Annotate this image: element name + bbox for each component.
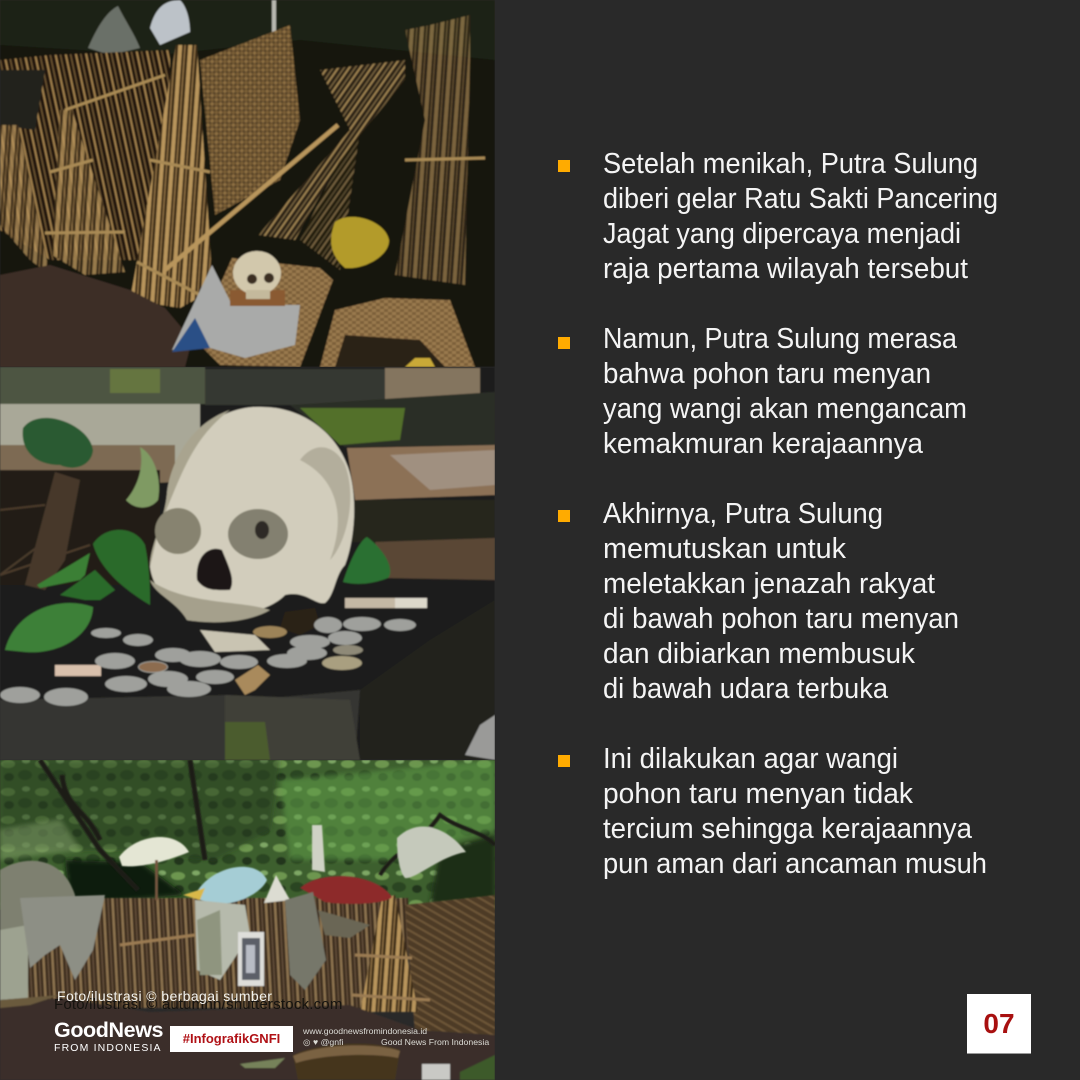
photo credit text: Foto/ilustrasi © berbagai sumber xyxy=(57,988,272,1004)
bullet 3 text: di bawah pohon taru menyan xyxy=(603,603,959,635)
bullet 1 text: Setelah menikah, Putra Sulung xyxy=(603,148,978,180)
bullet 4 text: pun aman dari ancaman musuh xyxy=(603,848,987,880)
bullet 1 text: diberi gelar Ratu Sakti Pancering xyxy=(603,183,998,215)
bullet 1 text: Jagat yang dipercaya menjadi xyxy=(603,218,961,250)
photo 3: Trunyan cemetery with umbrellas, cloth and bamboo fence xyxy=(0,760,495,1080)
bullet 2 text xyxy=(558,323,967,460)
logo: GoodNews from Indonesia xyxy=(54,1018,163,1054)
page number box: 07 xyxy=(983,1008,1015,1039)
photo credit text: Foto/ilustrasi © autumnn/shutterstock.com xyxy=(54,996,343,1013)
bullet 1 text xyxy=(558,148,998,285)
logo: GoodNews from Indonesia: GoodNews xyxy=(54,1018,163,1042)
bullet 2 text: yang wangi akan mengancam xyxy=(603,393,967,425)
bullet list xyxy=(558,148,998,880)
photo 1: bamboo grave enclosures with skull xyxy=(0,0,495,367)
hashtag label xyxy=(170,1026,293,1052)
page number box xyxy=(967,994,1031,1054)
photo credit text xyxy=(54,988,343,1013)
bullet 4 text: Ini dilakukan agar wangi xyxy=(603,743,898,775)
website and social handles xyxy=(303,1026,490,1047)
bullet 3 text: Akhirnya, Putra Sulung xyxy=(603,498,883,530)
website and social handles: Good News From Indonesia xyxy=(381,1037,489,1047)
photo 2: large skull on stone ledge with coins and leaves xyxy=(0,367,495,760)
bullet 4 text xyxy=(558,743,987,880)
bullet 1 text: raja pertama wilayah tersebut xyxy=(603,253,968,285)
bullet 4 text: tercium sehingga kerajaannya xyxy=(603,813,972,845)
bullet 2 text: Namun, Putra Sulung merasa xyxy=(603,323,957,355)
website and social handles: ◎ ♥ @gnfi xyxy=(303,1037,343,1047)
bullet 3 text xyxy=(558,498,959,705)
bullet 2 text: kemakmuran kerajaannya xyxy=(603,428,923,460)
bullet 3 text: dan dibiarkan membusuk xyxy=(603,638,916,670)
bullet 4 text: pohon taru menyan tidak xyxy=(603,778,914,810)
website and social handles: www.goodnewsfromindonesia.id xyxy=(303,1026,427,1036)
bullet 3 text: memutuskan untuk xyxy=(603,533,847,565)
hashtag label: #InfografikGNFI xyxy=(183,1031,280,1046)
logo: GoodNews from Indonesia: FROM INDONESIA xyxy=(54,1042,162,1054)
bullet 2 text: bahwa pohon taru menyan xyxy=(603,358,931,390)
photo column: three stacked photographs xyxy=(0,0,495,1080)
bullet 3 text: di bawah udara terbuka xyxy=(603,673,888,705)
bullet 3 text: meletakkan jenazah rakyat xyxy=(603,568,935,600)
